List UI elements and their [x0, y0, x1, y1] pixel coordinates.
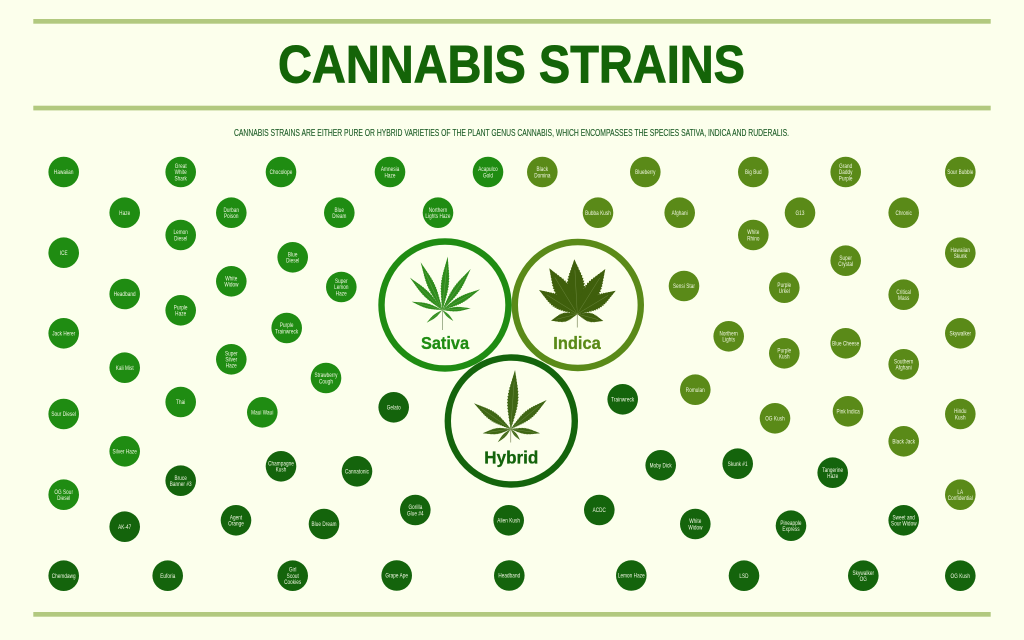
sativa strain: Hawaiian — [48, 157, 79, 187]
sativa strain: Strawberry Cough: Cough — [319, 379, 333, 386]
sativa strain: Amnesia Haze: Haze — [384, 173, 396, 180]
hybrid strain: Sweet and Sour Widow: Sweet and — [892, 515, 915, 522]
hybrid strain: Champagne Kush: Champagne — [268, 461, 294, 468]
sativa strain: Thai — [165, 387, 196, 417]
indica strain: Hawaiian Skunk: Skunk — [954, 253, 967, 260]
hybrid strain: Bruce Banner #3 — [165, 465, 196, 496]
title: CANNABIS STRAINS — [278, 35, 745, 94]
hybrid strain: Skywalker OG — [848, 560, 879, 591]
sativa strain: White Widow: White — [225, 276, 237, 283]
hybrid strain: Skunk #1 — [722, 448, 753, 479]
sativa strain: Super Lemon Haze: Lemon — [334, 285, 349, 292]
hybrid strain: AK-47 — [109, 511, 140, 542]
sativa strain: Super Silver Haze: Haze — [226, 363, 237, 370]
panel: Indica — [515, 242, 641, 368]
hybrid strain: Euforia: Euforia — [160, 573, 176, 580]
hybrid strain: Gelato: Gelato — [387, 405, 401, 412]
indica strain: Northern Lights — [713, 321, 744, 352]
hybrid strain: Tangerine Haze — [817, 457, 848, 488]
indica strain: OG Kush — [760, 403, 790, 434]
indica strain: Afghani — [664, 197, 695, 228]
sativa strain: Blue Dream — [324, 197, 355, 228]
sativa strain: Durban Poison: Poison — [224, 213, 239, 220]
sativa strain: OG Sour Diesel: OG Sour — [54, 489, 73, 496]
indica strain: Blue Cheese: Blue Cheese — [832, 341, 859, 348]
sativa strain: Durban Poison — [216, 197, 247, 228]
sativa strain: Kali Mist — [109, 352, 140, 383]
sativa strain: White Widow — [216, 266, 247, 297]
label: Indica: Indica — [553, 333, 601, 353]
sativa strain: Super Lemon Haze: Haze — [336, 291, 347, 298]
sativa strain: Thai: Thai — [176, 400, 185, 407]
indica strain: White Rhino — [738, 220, 769, 250]
indica strain: Hindu Kush — [945, 399, 976, 429]
indica strain: Purple Kush — [769, 338, 800, 369]
sativa strain: Great White Shark: White — [175, 170, 187, 177]
indica strain: Northern Lights: Lights — [722, 337, 735, 344]
sativa strain: Northern Lights Haze: Lights Haze — [425, 213, 451, 220]
label: Sativa: Sativa — [421, 333, 469, 353]
sativa strain: Strawberry Cough: Strawberry — [315, 372, 338, 379]
indica strain: Black Jack: Black Jack — [892, 439, 915, 446]
indica strain: Black Domina: Black — [536, 166, 548, 173]
sativa strain: ICE — [48, 237, 79, 268]
hybrid strain: ACDC — [584, 495, 615, 525]
indica strain: White Rhino: White — [747, 229, 759, 236]
hybrid strain: Skunk #1: Skunk #1 — [728, 461, 748, 468]
hybrid strain: Skywalker OG: Skywalker — [852, 570, 874, 577]
indica strain: Blueberry: Blueberry — [635, 170, 656, 177]
sativa strain: Maui Waui: Maui Waui — [251, 410, 273, 417]
sativa strain: Purple Trainwreck — [271, 313, 302, 343]
hybrid strain: Tangerine Haze: Haze — [827, 473, 838, 480]
indica strain: Critical Mass: Critical — [896, 289, 911, 296]
hybrid strain: Moby Dick — [645, 450, 676, 481]
hybrid strain: Chemdawg — [48, 560, 79, 591]
sativa strain: OG Sour Diesel: Diesel — [57, 495, 70, 502]
indica strain: Black Domina — [527, 157, 558, 187]
hybrid strain: Alien Kush — [493, 505, 524, 536]
sativa strain: Jack Herer — [48, 318, 79, 349]
sativa strain: Silver Haze — [109, 436, 140, 467]
indica strain: Romulan — [680, 374, 711, 405]
icon: indica leaf — [535, 259, 619, 328]
sativa strain: Strawberry Cough — [311, 363, 341, 393]
sativa strain: Blue Diesel: Diesel — [286, 258, 299, 265]
indica strain: Southern Afghani — [888, 349, 919, 380]
indica strain: Sour Bubble: Sour Bubble — [947, 170, 973, 177]
sativa strain: Amnesia Haze — [375, 157, 405, 187]
hybrid strain: Girl Scout Cookies: Scout — [287, 573, 299, 580]
indica strain: Bubba Kush — [583, 197, 613, 228]
hybrid strain: Girl Scout Cookies — [277, 560, 308, 591]
hybrid strain: Girl Scout Cookies: Cookies — [284, 579, 301, 586]
sativa strain: Maui Waui — [247, 397, 278, 428]
indica strain: Grand Daddy Purple: Purple — [839, 176, 853, 183]
indica strain: G13: G13 — [796, 210, 804, 217]
hybrid strain: LSD: LSD — [739, 573, 749, 580]
sativa strain: Lemon Diesel: Diesel — [174, 236, 187, 243]
label: Hybrid: Hybrid — [484, 448, 538, 468]
sativa strain: Blue Dream: Blue — [335, 207, 344, 214]
hybrid strain: Moby Dick: Moby Dick — [650, 463, 672, 470]
sativa strain: Super Lemon Haze: Super — [335, 278, 348, 285]
hybrid strain: Cannatonic — [342, 456, 372, 487]
hybrid strain: White Widow: White — [689, 518, 701, 525]
hybrid strain: Pineapple Express: Express — [782, 526, 800, 533]
indica strain: Blueberry — [630, 157, 661, 187]
hybrid strain: Gorilla Glue #4: Gorilla — [409, 504, 423, 511]
sativa strain: White Widow: Widow — [224, 282, 239, 289]
sativa strain: Blue Diesel: Blue — [288, 252, 297, 259]
indica strain: Super Crystal: Crystal — [838, 261, 853, 268]
hybrid strain: Chemdawg: Chemdawg — [52, 573, 76, 580]
hybrid strain: Grape Ape: Grape Ape — [385, 573, 408, 580]
hybrid strain: Euforia — [152, 560, 183, 591]
indica strain: G13 — [785, 197, 815, 228]
indica strain: Purple Kush: Purple — [777, 348, 791, 355]
indica strain: Chronic — [888, 197, 919, 228]
sativa strain: Purple Haze: Haze — [175, 311, 186, 318]
hybrid strain: Blue Dream — [309, 509, 339, 539]
sativa strain: ICE: ICE — [60, 250, 68, 257]
sativa strain: Kali Mist: Kali Mist — [116, 365, 134, 372]
sativa strain: Silver Haze: Silver Haze — [113, 449, 137, 456]
indica strain: Bubba Kush: Bubba Kush — [585, 210, 611, 217]
hybrid strain: Sweet and Sour Widow — [888, 505, 919, 536]
sativa strain: Chocolope — [266, 157, 296, 187]
sativa strain: Purple Trainwreck: Purple — [280, 322, 294, 329]
sativa strain: Purple Trainwreck: Trainwreck — [275, 329, 298, 336]
hybrid strain: Alien Kush: Alien Kush — [497, 518, 520, 525]
hybrid strain: Girl Scout Cookies: Girl — [289, 567, 296, 574]
indica strain: LA Confidential: Confidential — [948, 495, 973, 502]
sativa strain: Durban Poison: Durban — [224, 207, 239, 214]
indica strain: OG Kush: OG Kush — [765, 416, 785, 423]
hybrid strain: Pineapple Express — [776, 510, 806, 541]
hybrid strain: Agent Orange: Agent — [230, 515, 243, 522]
sativa strain: Great White Shark: Shark — [175, 176, 187, 183]
sativa strain: Blue Diesel — [277, 242, 308, 273]
indica strain: Sour Bubble — [945, 157, 976, 187]
hybrid strain: Sweet and Sour Widow: Sour Widow — [891, 521, 917, 528]
indica strain: Purple Urkel: Urkel — [779, 288, 790, 295]
sativa strain: OG Sour Diesel — [48, 479, 79, 510]
sativa strain: Sour Diesel — [48, 399, 79, 429]
sativa strain: Blue Dream: Dream — [332, 213, 347, 220]
indica strain: Southern Afghani: Southern — [894, 359, 913, 366]
hybrid strain: Headband — [494, 560, 525, 591]
hybrid strain: Pineapple Express: Pineapple — [780, 520, 802, 527]
hybrid strain: Agent Orange: Orange — [228, 521, 244, 528]
indica strain: Sensi Star — [669, 271, 699, 301]
sativa strain: Lemon Diesel: Lemon — [173, 229, 188, 236]
indica strain: Critical Mass — [888, 279, 919, 310]
sativa strain: Hawaiian: Hawaiian — [54, 170, 73, 177]
indica strain: Pink Indica: Pink Indica — [836, 409, 860, 416]
hybrid strain: Trainwreck: Trainwreck — [611, 397, 634, 404]
hybrid strain: Cannatonic: Cannatonic — [345, 469, 369, 476]
hybrid strain: OG Kush — [945, 560, 976, 591]
hybrid strain: Lemon Haze: Lemon Haze — [618, 573, 645, 580]
indica strain: Grand Daddy Purple — [830, 157, 861, 187]
indica strain: Afghani: Afghani — [672, 210, 688, 217]
sativa strain: Purple Haze — [165, 295, 196, 326]
indica strain: Purple Urkel: Purple — [777, 282, 791, 289]
hybrid strain: White Widow — [680, 509, 711, 539]
indica strain: Hawaiian Skunk — [945, 237, 976, 268]
hybrid strain: Grape Ape — [381, 560, 412, 591]
sativa strain: Sour Diesel: Sour Diesel — [51, 412, 76, 419]
sativa strain: Headband — [109, 279, 140, 309]
hybrid strain: Gelato — [378, 392, 409, 423]
icon: hybrid leaf — [471, 370, 550, 443]
indica strain: Pink Indica — [833, 396, 863, 427]
sativa strain: Chocolope: Chocolope — [270, 170, 292, 177]
hybrid strain: Tangerine Haze: Tangerine — [822, 467, 843, 474]
hybrid strain: Blue Dream: Blue Dream — [311, 522, 337, 529]
indica strain: White Rhino: Rhino — [747, 236, 760, 243]
indica strain: LA Confidential — [945, 479, 976, 510]
hybrid strain: Gorilla Glue #4 — [400, 495, 431, 525]
panel: Sativa — [382, 242, 508, 368]
indica strain: Grand Daddy Purple: Daddy — [839, 170, 853, 177]
indica strain: Black Domina: Domina — [534, 173, 551, 180]
hybrid strain: Champagne Kush — [266, 451, 296, 482]
hybrid strain: Agent Orange — [221, 505, 251, 536]
hybrid strain: ACDC: ACDC — [593, 508, 606, 515]
hybrid strain: Bruce Banner #3: Banner #3 — [170, 481, 192, 488]
indica strain: Hindu Kush: Kush — [955, 415, 966, 422]
indica strain: Hawaiian Skunk: Hawaiian — [951, 247, 970, 254]
sativa strain: Super Lemon Haze — [326, 272, 357, 302]
indica strain: Critical Mass: Mass — [898, 295, 909, 302]
hybrid strain: Gorilla Glue #4: Glue #4 — [407, 511, 424, 518]
indica strain: Sensi Star: Sensi Star — [673, 284, 695, 291]
sativa strain: Great White Shark — [165, 157, 196, 187]
indica strain: Romulan: Romulan — [686, 387, 705, 394]
sativa strain: Acapulco Gold: Gold — [483, 173, 493, 180]
indica strain: Big Bud — [738, 157, 769, 187]
indica strain: Black Jack — [888, 426, 919, 457]
hybrid strain: Trainwreck — [607, 384, 638, 415]
indica strain: Blue Cheese — [830, 328, 861, 359]
sativa strain: Acapulco Gold — [473, 157, 503, 187]
sativa strain: Northern Lights Haze — [423, 197, 453, 228]
sativa strain: Haze: Haze — [119, 210, 130, 217]
indica strain: Big Bud: Big Bud — [745, 170, 762, 177]
hybrid strain: LSD — [729, 560, 759, 591]
hybrid strain: OG Kush: OG Kush — [951, 573, 970, 580]
indica strain: Skywalker: Skywalker — [949, 331, 971, 338]
icon: sativa leaf — [408, 256, 482, 330]
sativa strain: Super Silver Haze — [216, 344, 247, 375]
sativa strain: Amnesia Haze: Amnesia — [381, 166, 400, 173]
indica strain: LA Confidential: LA — [957, 489, 963, 496]
indica strain: Grand Daddy Purple: Grand — [839, 163, 852, 170]
hybrid strain: AK-47: AK-47 — [118, 524, 131, 531]
hybrid strain: Headband: Headband — [498, 573, 520, 580]
sativa strain: Super Silver Haze: Silver — [225, 357, 237, 364]
indica strain: Purple Kush: Kush — [779, 354, 790, 361]
indica strain: Northern Lights: Northern — [719, 331, 738, 338]
hybrid strain: White Widow: Widow — [688, 525, 703, 532]
indica strain: Super Crystal: Super — [839, 255, 852, 262]
indica strain: Chronic: Chronic — [896, 210, 912, 217]
sativa strain: Acapulco Gold: Acapulco — [478, 166, 498, 173]
indica strain: Super Crystal — [830, 245, 861, 276]
sativa strain: Super Silver Haze: Super — [225, 351, 238, 358]
indica strain: Hindu Kush: Hindu — [954, 408, 967, 415]
sativa strain: Great White Shark: Great — [175, 163, 187, 170]
sativa strain: Haze — [109, 197, 140, 228]
indica strain: Skywalker — [945, 318, 976, 349]
indica strain: Southern Afghani: Afghani — [896, 365, 912, 372]
sativa strain: Headband: Headband — [114, 292, 136, 299]
sativa strain: Purple Haze: Purple — [174, 305, 188, 312]
sativa strain: Jack Herer: Jack Herer — [52, 331, 75, 338]
hybrid strain: Bruce Banner #3: Bruce — [174, 475, 187, 482]
sativa strain: Lemon Diesel — [165, 220, 196, 250]
hybrid strain: Champagne Kush: Kush — [276, 467, 286, 474]
hybrid strain: Lemon Haze — [616, 560, 647, 591]
panel: Hybrid — [448, 358, 575, 484]
hybrid strain: Skywalker OG: OG — [860, 576, 867, 583]
indica strain: Purple Urkel — [769, 272, 800, 303]
sativa strain: Northern Lights Haze: Northern — [429, 207, 447, 214]
